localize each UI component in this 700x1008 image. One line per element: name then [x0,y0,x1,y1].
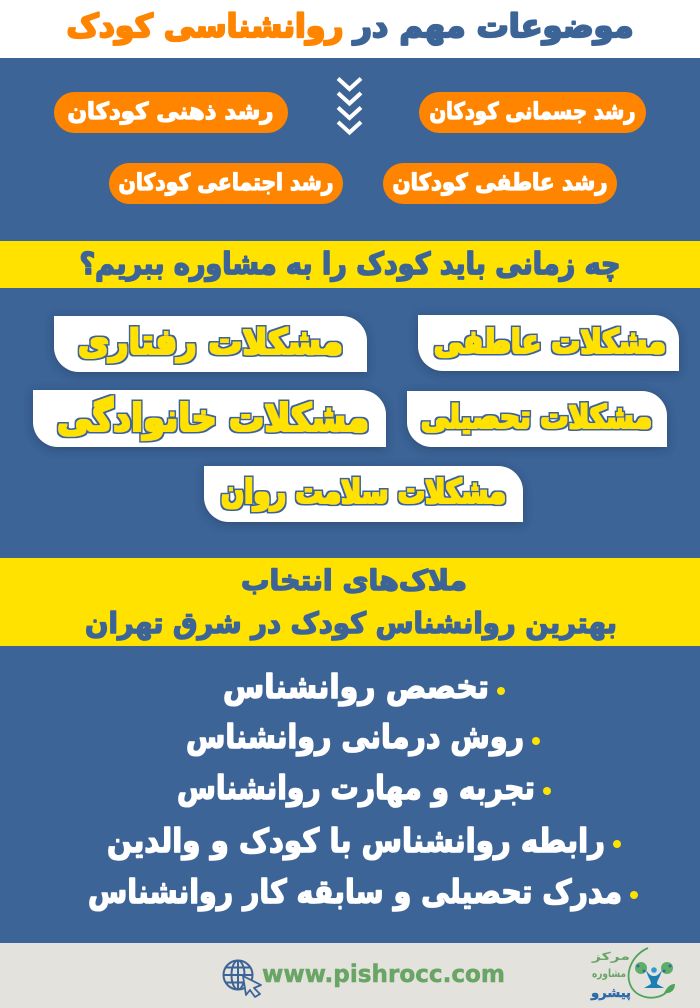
icon: down chevrons [338,78,361,132]
tag: emotional problems: مشکلات عاطفی [434,322,666,361]
pill: mental development: رشد ذهنی کودکان [68,99,274,125]
panel: criteria list [0,646,700,943]
heading: selection criteria [0,558,700,646]
heading: selection criteria: ملاک‌های انتخاب [241,564,467,597]
pill: physical development [419,92,646,133]
pill: social development [109,163,343,204]
tag: academic problems: مشکلات تحصیلی [421,398,652,436]
tag: emotional problems [418,315,679,371]
tag: mental health problems [204,466,523,522]
pill: physical development: رشد جسمانی کودکان [430,99,636,125]
tag: family problems: مشکلات خانوادگی [57,396,369,440]
title: orange part: روانشناسی کودک [66,7,344,45]
tag: behavioral problems: مشکلات رفتاری [78,323,343,363]
heading: when to see a counselor [0,241,700,288]
logo emblem [629,948,675,998]
tag: behavioral problems [54,316,367,372]
footer [0,943,700,1008]
pill: emotional development: رشد عاطفی کودکان [392,170,608,196]
pill: mental development [54,92,288,133]
list item 5: مدرک تحصیلی و سابقه کار روانشناس [88,872,622,912]
logo: counseling center [590,948,675,1001]
list item 4: رابطه روانشناس با کودک و والدین [107,821,605,861]
heading: when to see a counselor: چه زمانی باید کودک را به مشاوره ببریم؟ [80,247,620,282]
list item 3: تجربه و مهارت روانشناس [177,768,535,808]
title banner [0,0,700,58]
pill: social development: رشد اجتماعی کودکان [118,170,334,196]
list item 1: تخصص روانشناس [223,667,489,707]
logo wordmark: مشاوره [592,967,626,980]
title: blue part: موضوعات مهم در [352,7,634,45]
list item 2: روش درمانی روانشناس [186,717,524,757]
tag: mental health problems: مشکلات سلامت روان [221,472,506,512]
heading: selection criteria: بهترین روانشناس کودک در شرق تهران [85,606,617,640]
logo wordmark: مرکز [591,950,630,963]
icon: globe with cursor [224,960,261,997]
website url: www.pishrocc.com [262,960,505,988]
pill: emotional development [383,163,617,204]
tag: academic problems [407,391,667,447]
panel: problem types [0,288,700,558]
panel: child development topics [0,58,700,241]
logo wordmark [590,950,631,1001]
logo wordmark: پیشرو [590,986,631,1001]
